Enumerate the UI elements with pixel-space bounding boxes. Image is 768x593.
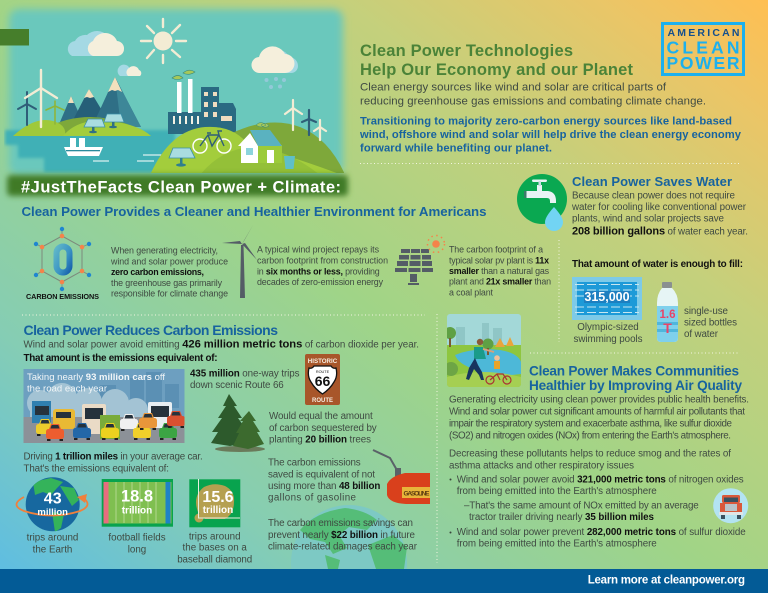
wind turbines right [285,100,326,140]
text: 1 trillion miles: That's the emissions equivalent of: [24,463,169,474]
text: solar footprint: typical solar pv plant is 11x [449,255,549,265]
icon: football field 18.8 trillion: 18.8 [121,488,153,506]
text: $22 billion [268,518,418,553]
text: saves water: plants, wind and solar projects save [572,214,725,225]
icon: gasoline can: GASOLINE [404,490,430,498]
icon: globe 43 million: 43 [44,491,62,508]
text: air quality body: asthma attacks and other respiratory issues [449,460,634,471]
solar array foreground [169,148,195,167]
text: wind project: decades of zero-emission energy [257,277,384,287]
text: saves water: Because clean power does not require [572,190,736,201]
intro blue statement: Transitioning to majority zero-carbon energy sources like land-based [360,116,732,128]
logo: American Clean Power [662,24,744,74]
icon: swimming pool 315,000: 315,000 [584,290,630,304]
text: trips around the Earth: the Earth [33,544,72,555]
wind turbines left [18,70,64,127]
intro blue statement: forward while benefiting our planet. [360,143,552,155]
text: 48 billion gallons: using more than 48 billion [268,481,380,492]
bullet list: pollutants: –That's the same amount of NOx emitted by an average [464,500,699,511]
icon: baseball diamond 15.6 trillion: trillion [203,505,233,516]
icon: gasoline can [373,450,430,504]
logo: American Clean Power: CLEAN [666,38,740,58]
mountains [60,77,141,127]
icon: football field 18.8 trillion: trillion [122,505,152,516]
right hills [150,122,346,177]
section heading: saves water: Clean Power Saves Water [572,174,732,189]
text: solar footprint: The carbon footprint of a [449,245,543,255]
solar arrays on island [84,114,124,133]
icon: zero carbon emissions [26,227,99,301]
text: saves water: 208 billion gallons of water each year. [572,226,748,238]
bullet list: pollutants: from being emitted into the Earth's atmosphere [457,539,657,550]
text: football fields long: football fields [108,533,166,544]
left island hills [13,117,151,136]
text: 48 billion gallons [268,458,380,504]
icon: pine trees [211,394,265,452]
icon: zero carbon emissions: CARBON EMISSIONS [26,292,99,301]
icon: water bottle 1.6 T: 1.6 [660,309,676,321]
bullet list: pollutants: tractor trailer driving nearly 35 billion miles [469,512,655,523]
icon: water bottle 1.6 T: T [663,320,672,336]
main heading: Clean Power Technologies [360,42,573,60]
text: zero carbon emissions: responsible for climate change [111,288,228,298]
intro text [360,82,706,107]
text: wind project: A typical wind project repays its [257,245,380,255]
text: 20 billion trees: planting 20 billion trees [269,435,371,446]
section heading: air quality [529,364,742,393]
text: 20 billion trees: of carbon sequestered by [269,423,377,434]
icon: Route 66 sign: ROUTE [312,398,333,404]
text: $22 billion: prevent nearly $22 billion in future [268,530,416,541]
text: zero carbon emissions [110,246,228,298]
text: solar footprint: plant and 21x smaller than [449,277,551,287]
text: zero carbon emissions: zero carbon emissions, [111,267,204,277]
icon: truck [713,488,748,523]
text: equivalent of: That amount is the emissions equivalent of: [24,353,218,364]
text: solar footprint: smaller than a natural gas [449,266,550,276]
text: bottles [684,306,737,340]
icon: water bottle 1.6 T [657,282,678,342]
text: air quality body: (SO2) and nitrogen oxides (NOx) from entering the Earth's atmosphere. [449,431,731,442]
rain drops [264,77,286,89]
text: wind project: in six months or less, providing [257,266,380,276]
icon: wind turbine [222,225,257,298]
footer bar: Learn more at cleanpower.org [588,575,745,587]
text: trips around the Earth: trips around [27,533,78,544]
icon: baseball diamond 15.6 trillion [189,479,240,527]
text: 1 trillion miles [24,451,203,474]
bullet list: pollutants [450,474,746,550]
text: bottles: single-use [684,306,729,317]
text: wind project [257,245,388,287]
icon: Route 66 sign: 66 [315,373,330,389]
icon: faucet on green circle [517,174,567,231]
main heading: Help Our Economy and our Planet [360,61,634,79]
water [5,130,175,172]
text: baseball diamond: trips around [189,531,241,542]
icon: sun [141,19,186,63]
bullet list: pollutants: from being emitted into the Earth's atmosphere [457,486,657,497]
bullet list: pollutants: Wind and solar power avoid 321,000 metric tons of nitrogen oxides [457,474,744,485]
icon: baseball diamond 15.6 trillion: 15.6 [202,489,234,506]
icon: globe 43 million: million [37,507,68,518]
icon: large faint globe [291,505,407,569]
icon: Route 66 sign [305,354,340,405]
text: solar footprint: a coal plant [449,287,494,297]
text: football fields long: long [128,544,146,555]
factory with chimneys [168,70,236,136]
logo: American Clean Power: POWER [666,53,740,73]
text: 48 billion gallons: saved is equivalent of not [268,469,375,480]
text: enough to fill: That amount of water is enough to fill: [572,259,743,270]
text: Route 66 trips: down scenic Route 66 [190,380,284,391]
icon: Route 66 sign: HISTORIC [308,358,338,365]
main heading [360,42,634,79]
text: 48 billion gallons: gallons of gasoline [268,493,357,504]
image: traffic with cars: Taking nearly 93 million cars off [27,372,165,383]
logo: American Clean Power: AMERICAN [668,27,740,39]
text: air quality body [449,395,749,471]
text: Route 66 trips: 435 million one-way trips [190,369,300,380]
text: $22 billion: The carbon emissions savings can [268,518,413,529]
bullet list: pollutants: Wind and solar power prevent 282,000 metric tons of sulfur dioxide [457,527,746,538]
text: $22 billion: climate-related damages each year [268,542,418,553]
text: trips around the Earth [27,533,78,555]
icon: Route 66 sign: ROUTE [316,370,330,374]
section heading: air quality: Clean Power Makes Communities [529,364,739,379]
text: air quality body: Decreasing these pollutants helps to reduce smog and the rates of [449,449,731,460]
text: air quality body: Wind and solar power cut significant amounts of harmful air pollutants that [449,406,745,417]
text: 426 million metric tons: Wind and solar power avoid emitting 426 million metric tons of carbon dioxide per year. [24,339,419,351]
text: air quality body: Generating electricity using clean power provides public health benefits. [449,395,749,406]
illustration: family in park [444,314,521,387]
text: bottles: of water [684,329,719,340]
text: zero carbon emissions: the greenhouse gas primarily [111,278,223,288]
text: saves water: water for cooling like conventional power [571,202,747,213]
image: traffic with cars [24,369,185,443]
text: baseball diamond: baseball diamond [177,554,252,565]
text: swimming pools [574,322,643,345]
text: solar footprint [449,245,551,297]
house with solar roof [238,130,282,163]
intro text: Clean energy sources like wind and solar are critical parts of [360,82,667,94]
icon: globe 43 million [16,477,88,532]
text: 20 billion trees: Would equal the amount [269,411,373,422]
footer bar [0,569,768,593]
text: football fields long [108,533,166,555]
icon: swimming pool 315,000 [572,277,642,320]
intro blue statement [359,116,742,155]
text: zero carbon emissions: wind and solar power produce [110,256,228,266]
text: swimming pools: swimming pools [574,334,643,345]
bicycle [193,131,231,153]
icon: solar panel and sun [395,236,444,285]
intro blue statement: wind, offshore wind and solar will help drive the clean energy economy [359,129,742,141]
hero illustration: clean energy landscape [5,9,346,177]
trash can [284,156,295,169]
text: Route 66 trips [190,369,300,391]
section heading: cleaner environment: Clean Power Provides a Cleaner and Healthier Environment for Americans [22,204,486,219]
icon: football field 18.8 trillion [102,479,173,527]
text: zero carbon emissions: When generating electricity, [111,246,218,256]
text: baseball diamond [177,531,252,565]
intro text: reducing greenhouse gas emissions and combating climate change. [360,95,706,107]
text: 48 billion gallons: The carbon emissions [268,458,361,469]
boat [64,138,171,161]
section heading: reduces carbon: Clean Power Reduces Carbon Emissions [24,322,278,338]
banner: #JustTheFacts: #JustTheFacts Clean Power + Climate: [21,178,341,196]
text: wind project: carbon footprint from construction [257,256,388,266]
section heading: air quality: Healthier by Improving Air Quality [529,378,742,393]
text: baseball diamond: the bases on a [183,543,247,554]
text: bottles: sized bottles [684,318,737,329]
clouds [68,31,298,76]
green tab at left edge [0,29,29,46]
text: air quality body: impair the respiratory system and exacerbate asthma, like sulfur dioxide [449,419,733,430]
image: traffic with cars: the road each year [27,384,107,395]
text: 1 trillion miles: Driving 1 trillion miles in your average car. [24,451,203,462]
text: saves water [571,190,748,238]
text: swimming pools: Olympic-sized [577,322,639,333]
text: 20 billion trees [269,411,377,446]
